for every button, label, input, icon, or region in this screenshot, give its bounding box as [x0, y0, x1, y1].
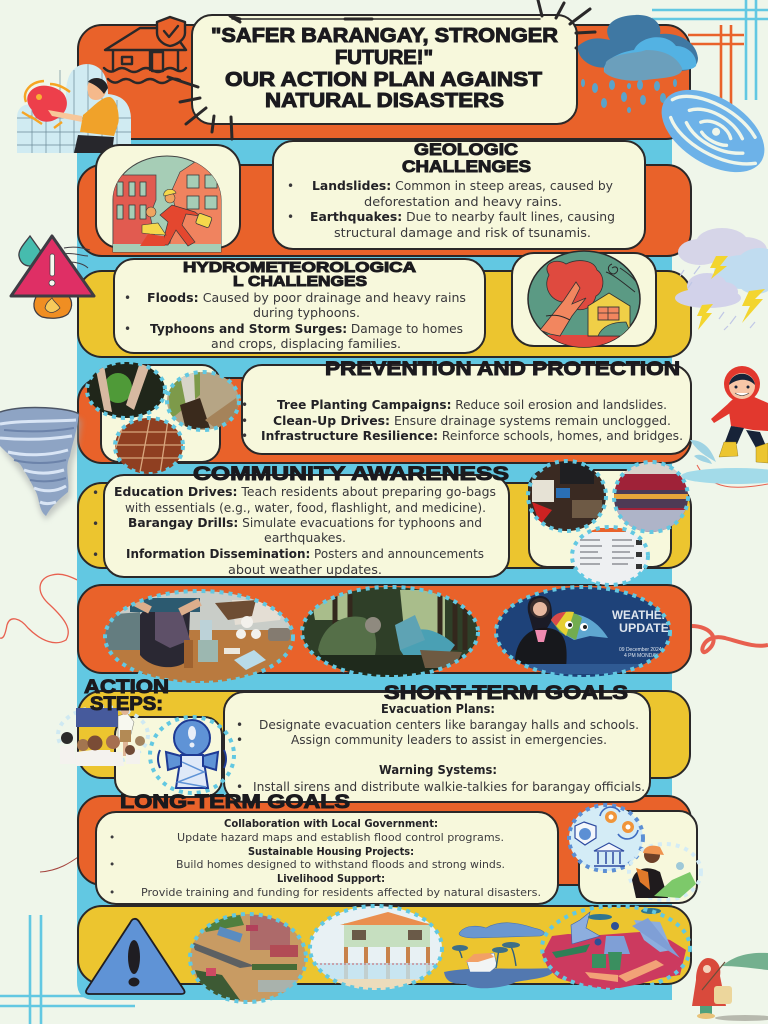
photo: weather update broadcast: UPDATE: [619, 623, 669, 635]
panel: yellow community band: [78, 483, 691, 568]
photo: weather update broadcast: 09 December 2024: [619, 647, 662, 653]
icon: house with shield above water: [104, 17, 186, 83]
panel: orange title band: [78, 25, 690, 139]
geologic bullet text: deforestation and heavy rains.: [364, 195, 562, 209]
short-term goals text: •: [236, 780, 243, 794]
community awareness bullet text: •: [92, 548, 99, 562]
hydrometeorological bullet text: Typhoons and Storm Surges: Damage to homes: [150, 322, 463, 336]
icon: child in red raincoat: [711, 366, 768, 463]
photo: packing emergency bag: [100, 590, 300, 686]
long-term goals text: •: [109, 859, 115, 871]
long-term goals text: Provide training and funding for residents affected by natural disasters.: [141, 887, 541, 899]
short-term goals text: Warning Systems:: [379, 763, 497, 777]
red squiggle left: [0, 565, 113, 643]
title text: NATURAL DISASTERS: [265, 90, 504, 112]
geologic bullet text: [287, 179, 615, 240]
icon: warning triangle bottom: [86, 919, 185, 994]
long-term goals text: Build homes designed to withstand floods and strong winds.: [176, 859, 505, 871]
heading: long-term goals: LONG-TERM GOALS: [120, 792, 350, 813]
title text: OUR ACTION PLAN AGAINST: [225, 69, 542, 91]
image card: long-term icons: [569, 805, 701, 903]
short-term goals text: •: [236, 733, 243, 747]
illustration: house in storm surge: [444, 923, 556, 988]
prevention bullet text: Tree Planting Campaigns: Reduce soil erosion and landslides.: [277, 398, 667, 412]
panel: orange prevention band: [78, 378, 691, 463]
icon: dark storm cloud with rain: [578, 15, 698, 113]
community awareness bullet text: Education Drives: Teach residents about preparing go-bags: [114, 485, 496, 499]
heading: short-term goals: SHORT-TERM GOALS: [384, 683, 628, 704]
icon: puddle splash: [681, 440, 768, 484]
long-term goals text: Update hazard maps and establish flood control programs.: [177, 832, 504, 844]
long-term goals text: Livelihood Support:: [277, 873, 385, 885]
geologic bullet text: •: [287, 179, 294, 193]
icon: person in wind with umbrella: [692, 953, 768, 1021]
long-term goals text: [109, 818, 541, 899]
heading: hydrometeorological challenges: [183, 259, 416, 290]
photo: weather update broadcast: 4 PM MONDAY: [624, 653, 659, 659]
geologic bullet text: Earthquakes: Due to nearby fault lines, causing: [310, 210, 615, 224]
title burst ticks: [168, 0, 600, 139]
title card: [192, 15, 577, 124]
prevention bullet text: •: [241, 398, 248, 412]
hydrometeorological bullet text: Floods: Caused by poor drainage and heavy rains: [147, 291, 466, 305]
panel: orange long-term band: [78, 796, 691, 885]
geologic bullet text: structural damage and risk of tsunamis.: [334, 226, 591, 240]
icon: engineer with city model: [629, 844, 701, 900]
hydrometeorological bullet text: •: [124, 322, 131, 336]
community awareness bullet text: with essentials (e.g., water, food, flashlight, and medicine).: [125, 501, 486, 515]
photo: weather update broadcast: WEATHER: [612, 610, 671, 622]
red line near puddle: [697, 465, 768, 487]
dark red line at left of long-term goals: [40, 845, 99, 872]
heading: geologic challenges: CHALLENGES: [402, 157, 531, 176]
prevention bullet text: •: [241, 429, 248, 443]
short-term goals text: Install sirens and distribute walkie-talkies for barangay officials.: [253, 780, 645, 794]
icon: storm clouds with lightning: [675, 228, 768, 330]
title text: FUTURE!": [335, 47, 433, 69]
title text: [211, 25, 559, 112]
geologic bullet text: Landslides: Common in steep areas, caused by: [312, 179, 613, 193]
image card: rescuers in damaged city: [96, 145, 240, 252]
heading: geologic challenges: [402, 140, 531, 176]
text card: long-term goals: [96, 812, 558, 904]
photo: teacher and students: [58, 707, 148, 766]
prevention bullet text: [241, 398, 683, 443]
text card: community awareness: [92, 464, 509, 577]
title text: "SAFER BARANGAY, STRONGER: [211, 25, 559, 47]
hydrometeorological bullet text: [124, 291, 466, 351]
icon: blue swirl: [647, 73, 768, 189]
text card: hydrometeorological challenges: [114, 259, 485, 353]
decorative lines bottom left: [0, 915, 135, 1024]
heading: hydrometeorological challenges: HYDROMETEOROLOGICA: [183, 259, 416, 276]
illustration: family in debris: [542, 906, 690, 990]
text card: prevention and protection: [241, 359, 691, 454]
panel: orange photo band: [78, 585, 691, 673]
short-term goals text: Assign community leaders to assist in emergencies.: [291, 733, 607, 747]
heading: geologic challenges: GEOLOGIC: [414, 140, 518, 159]
heading: prevention and protection: PREVENTION AND PROTECTION: [325, 359, 680, 380]
prevention bullet text: Infrastructure Resilience: Reinforce schools, homes, and bridges.: [261, 429, 683, 443]
panel: yellow hydrometeorological band: [78, 271, 691, 357]
community awareness bullet text: •: [92, 517, 99, 531]
panel: yellow short-term band: [78, 691, 690, 778]
heading: action steps: ACTION: [84, 677, 169, 698]
photo: drainage pit: [166, 370, 242, 432]
community awareness bullet text: [92, 485, 496, 577]
icon: tornado: [0, 408, 82, 520]
heading: action steps: STEPS:: [90, 694, 163, 715]
hydrometeorological bullet text: during typhoons.: [253, 306, 360, 320]
blue background panel: [77, 120, 672, 1000]
short-term goals text: •: [236, 718, 243, 732]
icon: warning triangle with drop and flame: [11, 236, 94, 318]
community awareness bullet text: Barangay Drills: Simulate evacuations for typhoons and: [128, 516, 482, 530]
photo: hands planting: [86, 360, 166, 420]
photo: weather update broadcast: [494, 585, 674, 679]
icon: government and gears: [569, 805, 643, 871]
long-term goals text: Collaboration with Local Government:: [224, 818, 438, 830]
photo: information poster: [570, 525, 652, 587]
panel: orange geologic band: [78, 165, 691, 256]
icon: warning siren tower: [150, 717, 234, 793]
photo: aerial flood: [188, 912, 308, 1004]
long-term goals text: •: [109, 887, 115, 899]
prevention bullet text: Clean-Up Drives: Ensure drainage systems remain unclogged.: [273, 414, 671, 428]
geologic bullet text: •: [287, 210, 294, 224]
long-term goals text: Sustainable Housing Projects:: [248, 846, 414, 858]
icon: person holding hurricane on grid: [17, 64, 131, 153]
photo: brick wall rebar: [114, 416, 186, 476]
photo: elevated house diagram: [308, 905, 444, 991]
decorative grid lines top right: [652, 0, 768, 127]
community awareness bullet text: •: [92, 486, 99, 500]
long-term goals text: •: [109, 832, 115, 844]
image card: prevention photos: [86, 360, 242, 476]
image card: tree and house in storm: [512, 251, 656, 355]
short-term goals text: Designate evacuation centers like barangay halls and schools.: [259, 718, 639, 732]
heading: community awareness: COMMUNITY AWARENESS: [193, 464, 509, 485]
red squiggle right: [691, 626, 768, 652]
panel: yellow bottom band: [78, 906, 691, 984]
heading: hydrometeorological challenges: L CHALLENGES: [233, 273, 367, 290]
text card: geologic challenges: [273, 140, 645, 249]
image card: community photos: [526, 460, 690, 587]
photo: tree planting in forest: [300, 585, 480, 685]
prevention bullet text: •: [241, 414, 248, 428]
text card: short-term goals: [224, 683, 650, 802]
community awareness bullet text: earthquakes.: [264, 531, 346, 545]
community awareness bullet text: about weather updates.: [228, 563, 382, 577]
hydrometeorological bullet text: •: [124, 291, 131, 305]
heading: action steps: [84, 677, 169, 715]
hydrometeorological bullet text: and crops, displacing families.: [211, 337, 401, 351]
photo: go-bag contents: [526, 460, 608, 532]
photo: group at barangay hall: [612, 460, 690, 534]
short-term goals text: [236, 702, 645, 794]
community awareness bullet text: Information Dissemination: Posters and announcements: [126, 547, 484, 561]
image card: action steps: [115, 717, 234, 797]
short-term goals text: Evacuation Plans:: [381, 702, 495, 716]
